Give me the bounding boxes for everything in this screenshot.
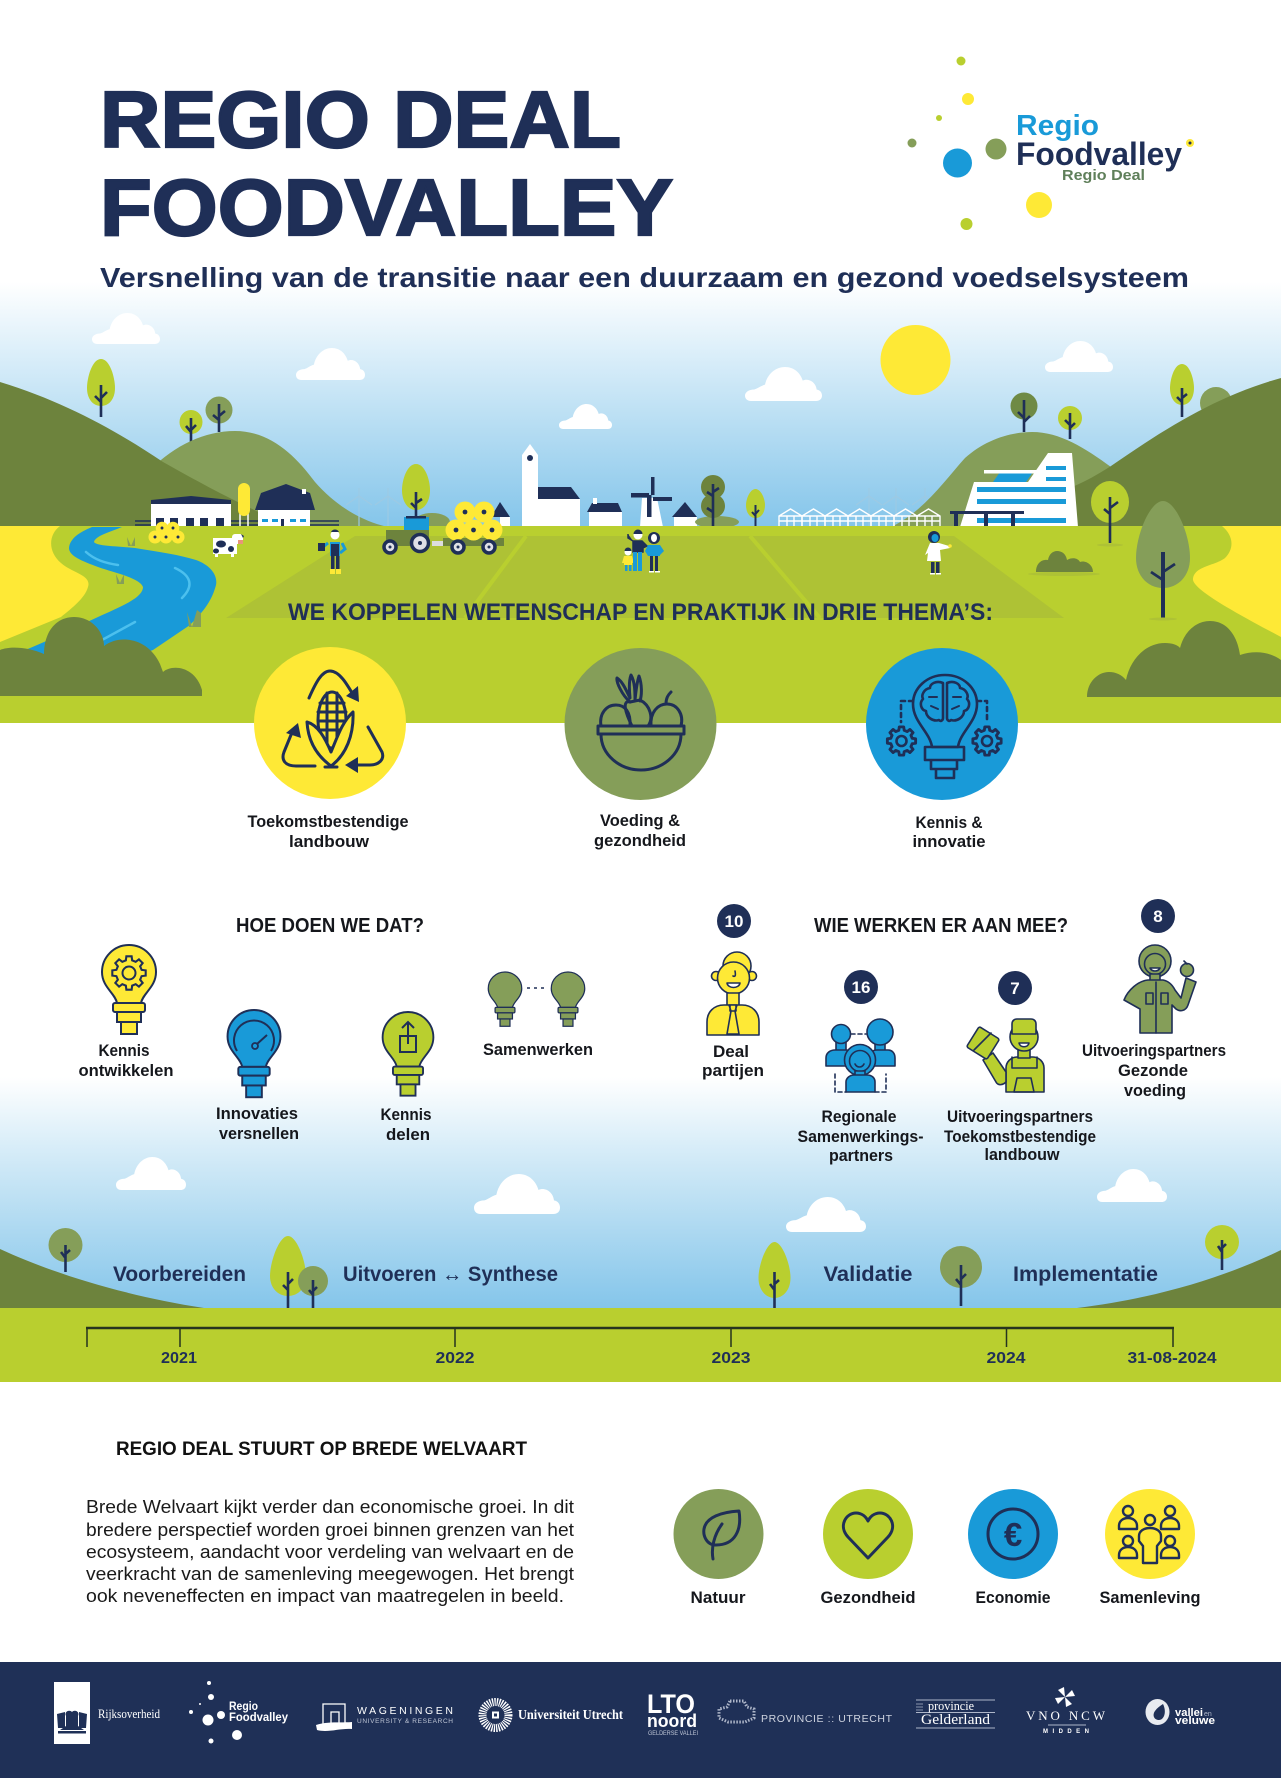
- timeline years: 2022: [436, 1350, 474, 1367]
- icon: economy euro: [968, 1489, 1058, 1579]
- logo: VNO NCW Midden: [1026, 1687, 1106, 1735]
- paragraph: ecosysteem, aandacht voor verdeling van welvaart en de: [86, 1542, 574, 1562]
- icon: corn with cycle arrows: [254, 647, 406, 799]
- logo: Regio Foodvalley Regio Deal: Foodvalley: [1016, 136, 1182, 172]
- logo: Vallei en Veluwe: veluwe: [1175, 1715, 1215, 1727]
- logo: VNO NCW Midden: VNO NCW: [1026, 1708, 1106, 1723]
- icon: deal party person: [707, 952, 759, 1035]
- logo: Provincie Gelderland: provincie: [928, 1698, 974, 1713]
- theme: Toekomstbestendige landbouw: [248, 647, 408, 851]
- farm buildings: [135, 483, 339, 527]
- logo: Universiteit Utrecht: Universiteit Utrecht: [518, 1707, 623, 1722]
- logo: LTO Noord: LTO: [647, 1689, 695, 1719]
- research building: [950, 453, 1078, 527]
- hay bales: [148, 522, 185, 544]
- logo: Regio Foodvalley Regio Deal: [908, 56, 1194, 230]
- icon: fruit bowl: [564, 648, 716, 800]
- label: [702, 1043, 764, 1080]
- label: [594, 812, 686, 850]
- icon: bulb with gear: [102, 945, 156, 1034]
- label: Economie: [976, 1589, 1050, 1607]
- label: partners: [829, 1147, 893, 1165]
- timeline years: [161, 1350, 1217, 1367]
- ground: [0, 526, 1281, 723]
- label: Natuur: [690, 1589, 746, 1607]
- phase labels: Implementatie: [1013, 1263, 1158, 1286]
- hills right: [893, 364, 1281, 527]
- logo: Wageningen: UNIVERSITY & RESEARCH: [357, 1718, 453, 1725]
- label: Kennis: [98, 1042, 150, 1060]
- wind turbines right: [856, 488, 938, 526]
- paragraph: [86, 1497, 574, 1606]
- icon: bulb with gauge: [228, 1010, 280, 1097]
- icon: regional partners group: [826, 1019, 895, 1092]
- logo: Wageningen: [316, 1704, 453, 1731]
- panel: timeline landscape: [0, 1157, 1281, 1382]
- label: versnellen: [219, 1125, 299, 1143]
- phase labels: Validatie: [824, 1263, 912, 1286]
- heading: HOE DOEN WE DAT?: [236, 915, 424, 937]
- landscape illustration: [0, 282, 1281, 723]
- timeline years: 31-08-2024: [1128, 1350, 1217, 1367]
- logo: Regio Foodvalley Regio Deal: Regio Deal: [1062, 167, 1145, 184]
- label: voeding: [1124, 1082, 1186, 1100]
- badge 7: [998, 971, 1032, 1005]
- section heading: themes: WE KOPPELEN WETENSCHAP EN PRAKTIJK IN DRIE THEMA’S:: [288, 599, 993, 626]
- wind turbines left: [346, 488, 401, 526]
- tractor and trailer: [384, 502, 504, 553]
- label: [248, 813, 408, 851]
- panel: brede welvaart: [86, 1438, 1200, 1607]
- panel: how we do it: [78, 915, 593, 1144]
- label: Regionale: [822, 1108, 896, 1126]
- ground band: [0, 1308, 1281, 1382]
- label: Samenleving: [1100, 1589, 1200, 1607]
- logo: LTO Noord: GELDERSE VALLEI: [648, 1731, 698, 1737]
- logo: LTO Noord: [647, 1689, 698, 1737]
- label: Uitvoeringspartners: [947, 1108, 1093, 1126]
- logo: Wageningen: WAGENINGEN: [357, 1705, 453, 1717]
- subtitle: Versnelling van de transitie naar een duurzaam en gezond voedselsysteem: [100, 262, 1189, 293]
- lower sky background: [0, 1077, 1281, 1309]
- badge 10: 10: [725, 912, 743, 931]
- icon: nature leaf: [674, 1489, 764, 1579]
- sun: [880, 325, 950, 395]
- label: Gezonde: [1118, 1062, 1188, 1080]
- logo: Provincie Gelderland: [916, 1698, 995, 1728]
- timeline years: 2023: [712, 1350, 751, 1367]
- logo: Regio Foodvalley: Foodvalley: [229, 1710, 288, 1724]
- family figures: [622, 530, 664, 572]
- icon: two connected bulbs: [488, 972, 585, 1026]
- label: [798, 1108, 924, 1165]
- badge 8: 8: [1153, 907, 1163, 926]
- label: Samenwerken: [483, 1041, 593, 1059]
- heading: REGIO DEAL STUURT OP BREDE WELVAART: [116, 1438, 527, 1460]
- clouds: [116, 1157, 1167, 1232]
- timeline axis: [86, 1328, 1174, 1347]
- heading: WIE WERKEN ER AAN MEE?: [814, 915, 1068, 937]
- icon: health worker with apple: [1124, 945, 1196, 1033]
- greenhouses: [779, 509, 940, 527]
- badge 8: [1141, 899, 1175, 933]
- logo: Provincie Utrecht: PROVINCIE :: UTRECHT: [761, 1713, 893, 1725]
- timeline years: 2024: [986, 1350, 1026, 1367]
- label: ontwikkelen: [78, 1062, 174, 1080]
- icon: economy euro: €: [1004, 1516, 1022, 1553]
- badge 7: 7: [1010, 979, 1020, 998]
- logo: Vallei en Veluwe: [1146, 1699, 1215, 1727]
- village tree: [402, 464, 450, 531]
- label: Kennis &: [916, 814, 983, 832]
- badge 10: [717, 904, 751, 938]
- icon: bulb with share arrow: [383, 1012, 433, 1096]
- footer band with partner logos: [0, 1662, 1281, 1778]
- background house: [491, 502, 510, 527]
- panel: who works on it: [702, 899, 1226, 1165]
- yellow fields: [0, 526, 89, 642]
- theme: Kennis & innovatie: [866, 648, 1018, 851]
- title: [100, 75, 673, 252]
- icon: farmer with crate: [966, 1019, 1044, 1092]
- hills left: [150, 431, 384, 526]
- right bush: [1087, 621, 1281, 697]
- label: Toekomstbestendige: [944, 1128, 1096, 1146]
- title: REGIO DEAL: [100, 75, 621, 164]
- icon: brain bulb with gears: [866, 648, 1018, 800]
- logo: Vallei en Veluwe: vallei: [1175, 1707, 1203, 1719]
- label: delen: [386, 1126, 430, 1144]
- title: FOODVALLEY: [100, 163, 673, 252]
- label: Gezondheid: [820, 1589, 916, 1607]
- paragraph: ook neveneffecten en impact van maatregelen in beeld.: [86, 1586, 564, 1606]
- church: [522, 444, 622, 527]
- timeline years: 2021: [161, 1350, 197, 1367]
- label: [944, 1108, 1096, 1164]
- label: [78, 1042, 174, 1080]
- icon: society people: [1105, 1489, 1195, 1579]
- badge 16: [844, 970, 878, 1004]
- logo: Rijksoverheid: Rijksoverheid: [98, 1707, 161, 1721]
- label: gezondheid: [594, 832, 686, 850]
- logo: VNO NCW Midden: MIDDEN: [1043, 1729, 1089, 1735]
- trees on left hills: [87, 359, 232, 443]
- logo: Rijksoverheid: [54, 1682, 161, 1744]
- logo: Regio Foodvalley: Regio: [229, 1699, 258, 1713]
- clouds: [92, 313, 1113, 429]
- label: Voeding &: [600, 812, 680, 830]
- label: landbouw: [984, 1146, 1060, 1164]
- label: Deal: [713, 1043, 749, 1061]
- logo: Regio Foodvalley: [189, 1681, 288, 1744]
- label: landbouw: [289, 833, 369, 851]
- hills: [0, 1249, 204, 1308]
- trees right field: [1091, 481, 1190, 620]
- label: Kennis: [380, 1106, 432, 1124]
- label: partijen: [702, 1062, 764, 1080]
- river: [0, 527, 216, 690]
- label: Innovaties: [216, 1105, 298, 1123]
- label: Toekomstbestendige: [248, 813, 408, 831]
- icon: health heart: [823, 1489, 913, 1579]
- paragraph: Brede Welvaart kijkt verder dan economische groei. In dit: [86, 1497, 574, 1517]
- theme: Voeding & gezondheid: [564, 648, 716, 850]
- small bush: [1028, 551, 1100, 576]
- sky: [0, 282, 1281, 527]
- left bush: [0, 617, 202, 696]
- trees: [48, 1225, 1239, 1308]
- label: [912, 814, 986, 851]
- label: [380, 1106, 432, 1144]
- scientist figure: [925, 531, 952, 574]
- label: [216, 1105, 299, 1143]
- logo: Vallei en Veluwe: en: [1204, 1711, 1212, 1718]
- double tree and small tree: [695, 475, 765, 528]
- logo: Regio Foodvalley Regio Deal: Regio: [1016, 110, 1099, 142]
- farmer figure: [318, 530, 345, 574]
- label: [1082, 1042, 1226, 1100]
- paragraph: veerkracht van de samenleving meegewogen. Het brengt: [86, 1564, 574, 1584]
- centre field: [226, 536, 1064, 618]
- label: Samenwerkings-: [798, 1128, 924, 1146]
- phase labels: [113, 1263, 1158, 1286]
- paragraph: bredere perspectief worden groei binnen grenzen van het: [86, 1520, 574, 1540]
- grass tufts: [116, 537, 201, 627]
- logo: Universiteit Utrecht: [482, 1702, 623, 1728]
- phase labels: Voorbereiden: [113, 1263, 246, 1286]
- cow: [213, 534, 244, 557]
- phase labels: Uitvoeren ↔ Synthese: [343, 1263, 558, 1286]
- label: innovatie: [912, 833, 986, 851]
- logo: LTO Noord: noord: [647, 1711, 697, 1731]
- label: Uitvoeringspartners: [1082, 1042, 1226, 1060]
- badge 16: 16: [852, 978, 870, 997]
- logo: Provincie Utrecht: [719, 1701, 893, 1725]
- windmill: [631, 477, 697, 527]
- logo: Provincie Gelderland: Gelderland: [921, 1712, 991, 1728]
